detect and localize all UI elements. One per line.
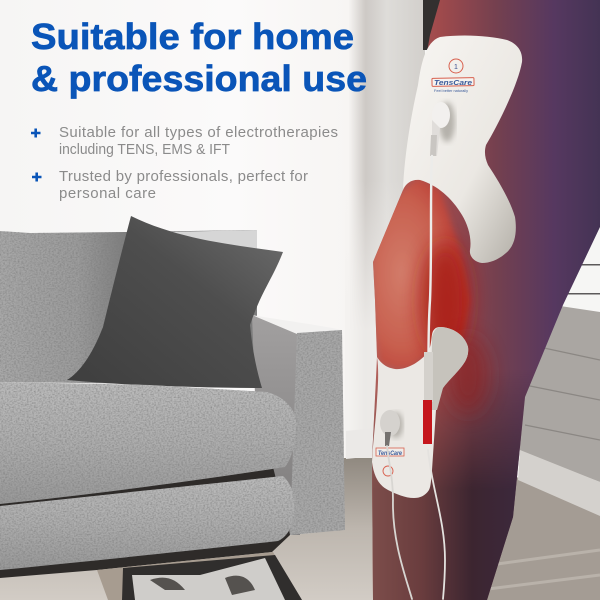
- wall background: [0, 0, 425, 600]
- magazines: [97, 552, 302, 600]
- red sleeve: [423, 400, 432, 444]
- TensCare logo: Feel better naturally: [434, 89, 468, 93]
- lower logo: TensCare: [378, 450, 402, 457]
- pad number badge: [449, 59, 463, 73]
- red heat glow: [421, 242, 469, 358]
- electrode cables: [387, 156, 445, 599]
- sofa back light top: [170, 230, 257, 250]
- skirting boards: [346, 428, 600, 516]
- seat cushion: [0, 382, 296, 504]
- pad number badge: 1: [454, 64, 458, 71]
- plus icon: [32, 172, 42, 182]
- base cushion: [0, 476, 295, 570]
- upper electrode pad: [403, 36, 522, 263]
- bullet 2: personal care: [59, 185, 156, 202]
- lower pad lobe: [431, 327, 468, 410]
- bullet 1: including TENS, EMS & IFT: [59, 142, 230, 158]
- sofa: [0, 216, 345, 578]
- knee: [373, 178, 470, 368]
- heading: & professional use: [31, 58, 367, 99]
- window and right wall: [500, 200, 600, 482]
- leg: [370, 0, 600, 600]
- snap connector: [430, 102, 450, 156]
- sofa underside shadow: [0, 440, 290, 578]
- lower electrode pad: [372, 327, 468, 498]
- plus icon: [31, 128, 40, 138]
- sofa arm highlight: [252, 315, 342, 334]
- lower snap connector: [380, 410, 403, 446]
- lower pad badge: [383, 466, 393, 476]
- lower logo: [376, 448, 404, 457]
- door frame edge: [423, 0, 443, 50]
- bullet 2: Trusted by professionals, perfect for: [59, 168, 308, 185]
- bullet 1: Suitable for all types of electrotherapies: [59, 124, 338, 141]
- TensCare logo: [432, 78, 474, 93]
- red glow below knee: [448, 337, 488, 413]
- lower leg shading: [372, 386, 527, 600]
- snap connector shadow: [439, 102, 455, 142]
- pillow: [67, 216, 283, 388]
- cable pin connector: [423, 352, 433, 444]
- heading: [31, 16, 367, 99]
- bullet 1: [31, 124, 338, 158]
- floor: [0, 458, 600, 600]
- sofa arm inner: [252, 315, 300, 535]
- TensCare logo: TensCare: [434, 78, 472, 87]
- heading: Suitable for home: [31, 16, 354, 57]
- bullet 2: [32, 168, 308, 202]
- sofa back: [0, 230, 257, 385]
- sofa arm front: [290, 330, 345, 535]
